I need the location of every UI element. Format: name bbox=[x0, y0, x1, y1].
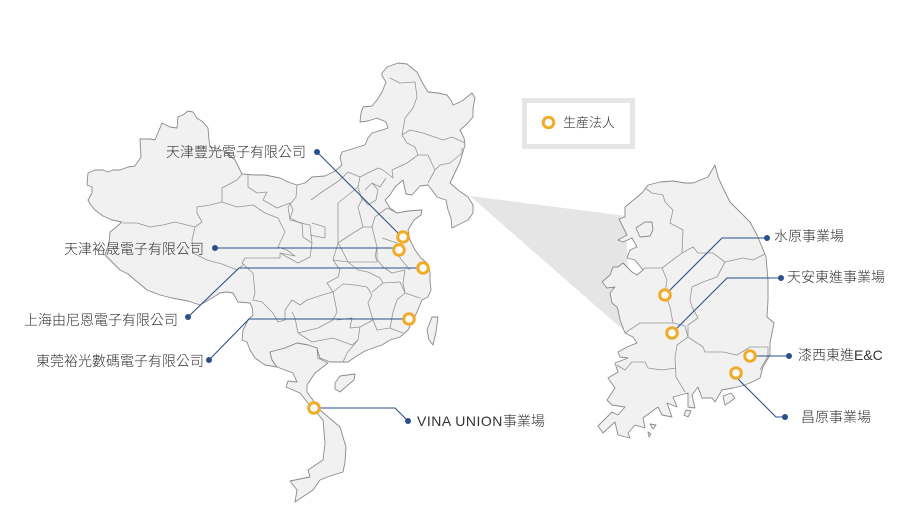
zoom wedge connecting China to Korea bbox=[470, 196, 630, 336]
marker: 昌原 bbox=[731, 368, 741, 378]
marker: 漆西 bbox=[745, 351, 755, 361]
legend text: 生産法人 bbox=[563, 115, 615, 130]
Korea south-coast islands bbox=[648, 393, 735, 437]
leader: 天津裕晟電子有限公司 bbox=[212, 245, 395, 251]
marker: 水原 bbox=[660, 290, 670, 300]
marker: VINA UNION bbox=[309, 403, 319, 413]
leader: 昌原事業場 bbox=[737, 378, 788, 420]
marker: 天津豐光 bbox=[398, 232, 408, 242]
leader: 天津豐光電子有限公司 bbox=[314, 149, 400, 235]
leader: 漆西東進E&C bbox=[752, 353, 792, 359]
label: 上海由尼恩電子有限公司: 上海由尼恩電子有限公司 bbox=[24, 312, 178, 328]
legend bbox=[524, 100, 632, 146]
Korea province borders bbox=[617, 188, 768, 392]
label: 天津豐光電子有限公司: 天津豐光電子有限公司 bbox=[166, 144, 306, 160]
leader: 上海由尼恩電子有限公司 bbox=[185, 268, 420, 320]
map: Vietnam bbox=[270, 343, 346, 502]
map: Taiwan bbox=[427, 317, 438, 345]
leader: 天安東進事業場 bbox=[674, 275, 784, 331]
province borders bbox=[123, 78, 465, 362]
label: 天安東進事業場: 天安東進事業場 bbox=[787, 269, 885, 285]
marker: 天津裕晟 bbox=[394, 245, 404, 255]
map: South Korea bbox=[598, 165, 774, 438]
label: 東莞裕光數碼電子有限公司: 東莞裕光數碼電子有限公司 bbox=[36, 353, 204, 369]
label: 昌原事業場: 昌原事業場 bbox=[801, 409, 871, 425]
marker: 天安 bbox=[667, 328, 677, 338]
marker: 上海由尼恩 bbox=[418, 263, 428, 273]
map: Hainan bbox=[335, 374, 355, 392]
map: China bbox=[87, 63, 475, 367]
label: VINA UNION事業場: VINA UNION事業場 bbox=[417, 413, 545, 429]
marker: 東莞裕光 bbox=[404, 314, 414, 324]
leader: 東莞裕光數碼電子有限公司 bbox=[206, 319, 406, 363]
leader: VINA UNION事業場 bbox=[316, 408, 411, 424]
legend marker bbox=[543, 117, 554, 128]
label: 天津裕晟電子有限公司: 天津裕晟電子有限公司 bbox=[64, 241, 204, 257]
leader: 水原事業場 bbox=[667, 235, 770, 293]
label: 水原事業場: 水原事業場 bbox=[774, 228, 844, 244]
label: 漆西東進E&C: 漆西東進E&C bbox=[798, 347, 883, 363]
